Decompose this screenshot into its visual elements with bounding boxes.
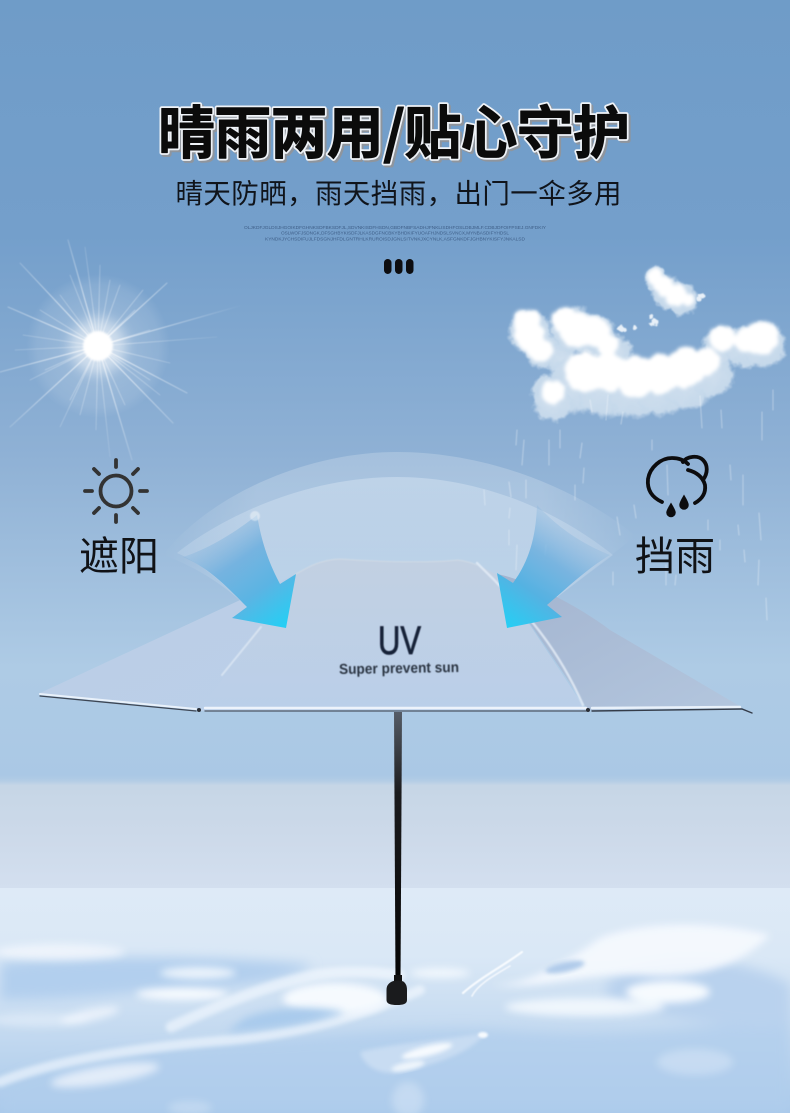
right blue arrow xyxy=(497,505,610,628)
fine print: KYNDKJYCHSDIFUJLFDSGNJHFDLGNTRHLKRUROISDJGNLSITVNKJXCYNLK,ASFGNKDFJGHBNYKISFYJNKALSD xyxy=(265,236,526,242)
fine print xyxy=(244,225,547,242)
umbrella pole xyxy=(394,712,402,982)
canopy ribs xyxy=(222,559,583,705)
water surface xyxy=(0,888,790,1113)
canopy hem xyxy=(40,694,752,713)
ripple reflection xyxy=(360,1032,488,1073)
left blue arrow xyxy=(183,515,296,628)
umbrella logo text: UV xyxy=(378,619,421,663)
title: 晴雨两用/贴心守护 xyxy=(158,88,630,170)
rain streaks xyxy=(484,390,773,620)
title: 晴雨两用/贴心守护 xyxy=(158,88,630,170)
umbrella logo text xyxy=(339,619,459,678)
icon: sun xyxy=(85,460,147,522)
umbrella canopy xyxy=(38,559,752,713)
ground band xyxy=(0,774,790,888)
fine print: OLJKDFJGLDSJHGOIKDFGHNKSDFBKSDFJL,SDVNKISDFHSDN,GBDFNBFSADHJFNKLISDHFOSLDBJMLF.CDBJDFOIFPSEJ.GNFDKIY xyxy=(244,225,547,231)
label: rain shield: 挡雨 xyxy=(635,524,715,582)
right panel xyxy=(497,574,743,710)
umbrella handle xyxy=(386,975,407,1005)
cloud xyxy=(507,267,788,423)
subtitle: 晴天防晒，雨天挡雨，出门一伞多用 xyxy=(176,171,622,211)
fine print: OSLWOFJSDNGK,DFSGHBYKISDFJLKASDGFNCBKYBHDKIFYUOAFHJNDSLSVNCX,MYNBASDIFYHDSL xyxy=(281,230,509,236)
title: 晴雨两用/贴心守护 xyxy=(160,90,632,172)
lens flare dot xyxy=(250,511,260,521)
sky background xyxy=(0,0,790,785)
left panel xyxy=(38,561,360,711)
icon: rain cloud xyxy=(648,457,707,516)
sun xyxy=(0,240,243,460)
three dots xyxy=(384,259,414,274)
umbrella logo text: Super prevent sun xyxy=(339,660,459,678)
translucent sky arcs xyxy=(163,452,636,607)
centre panel xyxy=(200,559,586,710)
label: sun shade: 遮阳 xyxy=(79,524,159,582)
